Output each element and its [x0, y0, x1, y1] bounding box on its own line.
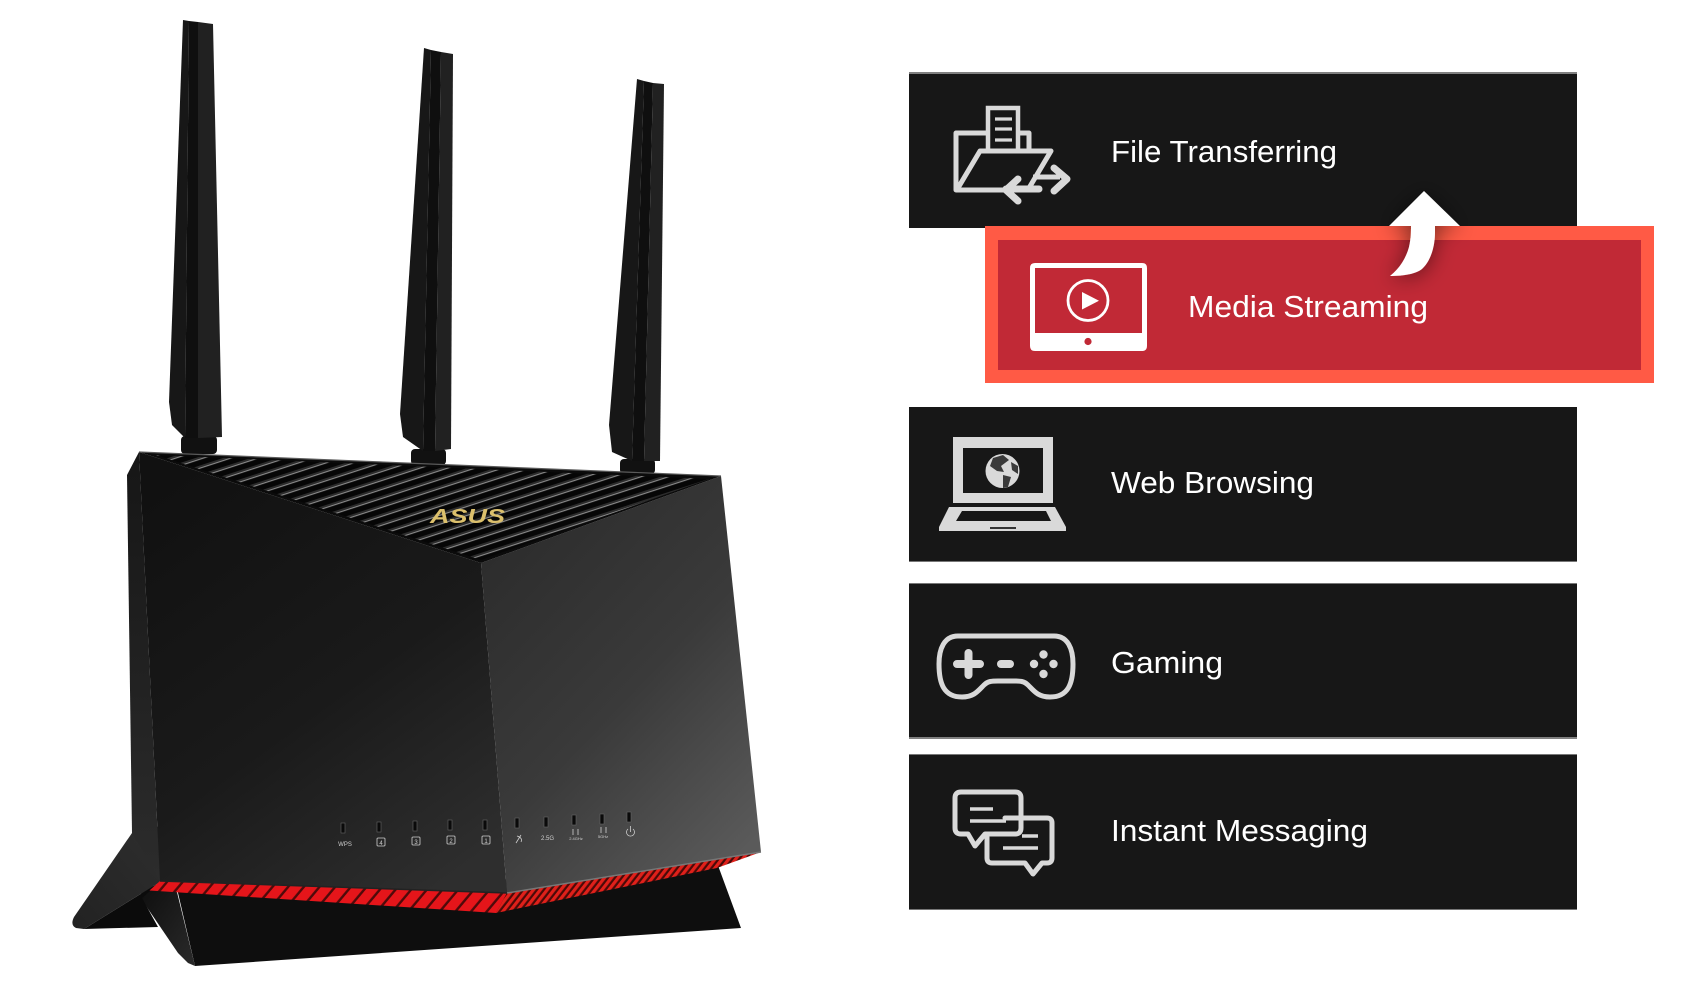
top vent — [139, 452, 721, 563]
shadow under stand leg — [84, 882, 160, 929]
panel: media streaming (highlighted) — [985, 226, 1654, 383]
status LEDs: 2 — [449, 839, 453, 845]
ASUS logo: ASUS — [429, 506, 506, 528]
label: instant messaging: Instant Messaging — [1111, 813, 1368, 848]
panel: file transferring — [909, 72, 1577, 228]
icon: chat bubbles — [955, 792, 1052, 874]
status LEDs: WPS — [338, 842, 352, 848]
status LEDs: 2.5G — [541, 836, 554, 842]
label: file transferring: File Transferring — [1111, 134, 1337, 169]
label: web browsing: Web Browsing — [1111, 465, 1314, 500]
icon: folder with transfer arrows — [956, 108, 1067, 201]
icon: laptop with globe — [939, 437, 1066, 531]
antenna right — [609, 79, 664, 474]
status LEDs: 3 — [414, 840, 418, 846]
router illustration — [72, 20, 761, 966]
left side edge of casing — [127, 452, 160, 881]
left stand leg — [72, 826, 160, 929]
status LEDs: 1 — [484, 839, 488, 845]
icon: game controller — [939, 636, 1073, 697]
status LEDs — [338, 812, 634, 848]
rear stand left facet — [140, 885, 195, 966]
status LEDs: 2.4GHz — [569, 836, 583, 841]
front left face — [139, 452, 507, 893]
status LEDs: 5GHz — [598, 834, 608, 839]
panel: instant messaging — [909, 754, 1577, 910]
status LEDs: 4 — [379, 841, 383, 847]
front right face — [481, 476, 761, 893]
label: gaming: Gaming — [1111, 645, 1223, 680]
panel: gaming — [909, 583, 1577, 739]
red vent strip — [150, 852, 761, 913]
label: media streaming: Media Streaming — [1188, 289, 1428, 324]
rear stand — [175, 860, 741, 966]
arrow: priority moves up — [1389, 191, 1460, 276]
antenna middle — [400, 48, 453, 465]
icon: monitor with play button — [1030, 263, 1147, 351]
antenna left — [169, 20, 222, 454]
panel: web browsing — [909, 407, 1577, 562]
